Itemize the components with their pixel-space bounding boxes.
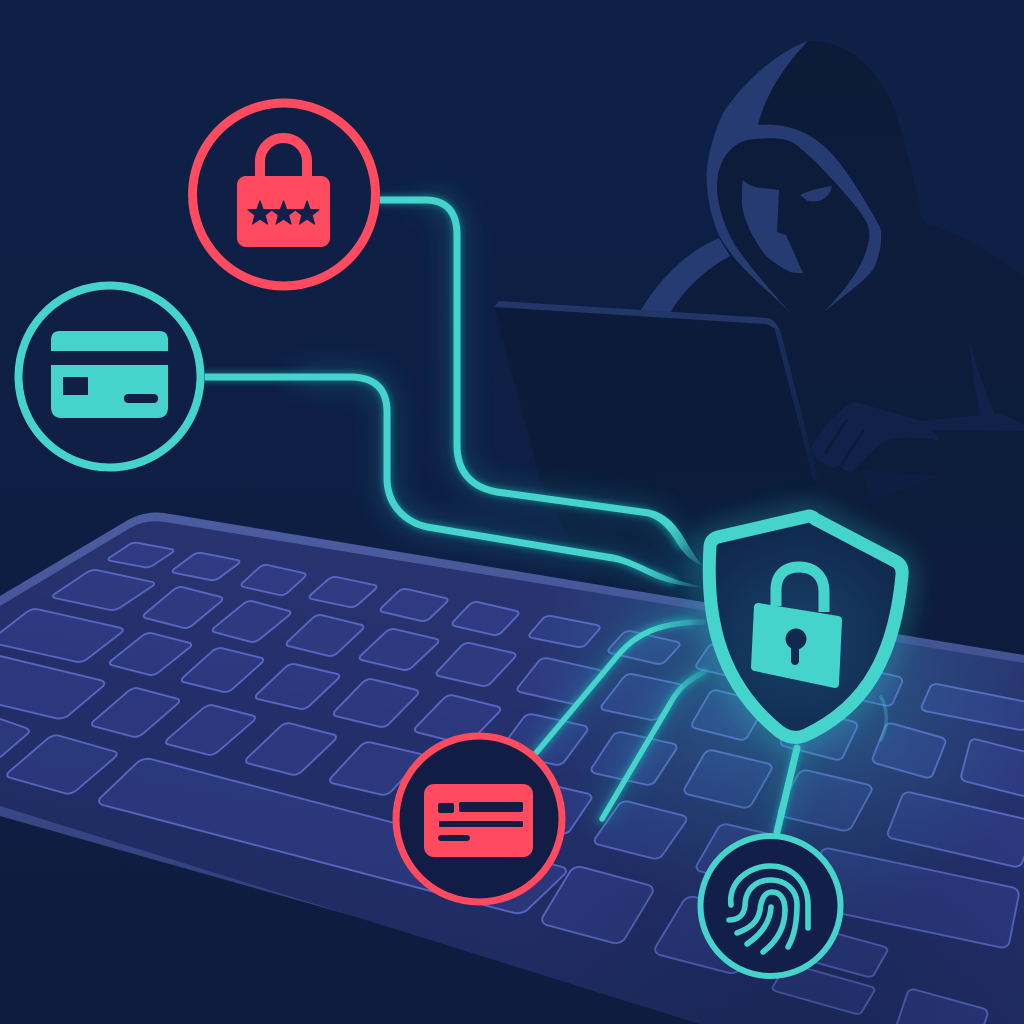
connector glow xyxy=(205,200,797,832)
padlock body xyxy=(237,176,330,247)
shield glow xyxy=(709,516,902,737)
hacker body silhouette xyxy=(560,41,1024,670)
connector: credit card to shield xyxy=(205,377,701,587)
hacker sleeve xyxy=(921,413,1024,431)
shield xyxy=(709,516,902,737)
glinting eye xyxy=(800,186,832,201)
connector: shield to fingerprint xyxy=(777,748,797,832)
form fields xyxy=(438,802,523,841)
lock shackle xyxy=(776,567,824,612)
keyhole xyxy=(786,628,806,665)
hacker hand xyxy=(810,402,941,472)
icon circle: form card xyxy=(396,736,562,902)
hood outline xyxy=(707,41,881,318)
face cheek highlight xyxy=(742,180,803,273)
left shoulder highlight xyxy=(641,238,730,312)
laptop xyxy=(494,301,820,600)
lock in shield xyxy=(755,567,838,684)
hacker arm crease xyxy=(969,338,995,416)
keys xyxy=(0,542,1024,1024)
card top band xyxy=(51,331,168,351)
fingerprint ridges xyxy=(729,866,808,952)
icon circle: credit card xyxy=(18,286,200,468)
teal glow on keyboard xyxy=(582,593,997,863)
connector: shield to form card xyxy=(536,622,704,753)
keyboard deck xyxy=(0,521,1024,1024)
card slot xyxy=(124,394,158,403)
icon circle: password lock xyxy=(192,103,376,286)
connector: password lock to shield xyxy=(380,200,703,566)
laptop keyboard deck xyxy=(862,470,941,500)
lock body xyxy=(755,607,838,684)
keyboard xyxy=(0,500,1024,1024)
card lower panel xyxy=(51,365,168,418)
laptop right bezel xyxy=(777,328,816,480)
form card body xyxy=(424,784,533,857)
icon circle: fingerprint xyxy=(700,836,840,976)
shield body xyxy=(709,516,902,737)
password stars xyxy=(248,201,319,224)
connector: shield to keyboard xyxy=(602,672,704,819)
laptop top edge xyxy=(494,301,779,330)
connector: faint right trace xyxy=(881,697,886,740)
padlock shackle xyxy=(260,138,307,178)
laptop lid xyxy=(494,306,820,600)
card chip xyxy=(63,377,88,395)
keyboard rim xyxy=(0,512,1024,1024)
hooded hacker figure xyxy=(560,41,1024,670)
lower right shading on keyboard xyxy=(578,799,1014,1024)
